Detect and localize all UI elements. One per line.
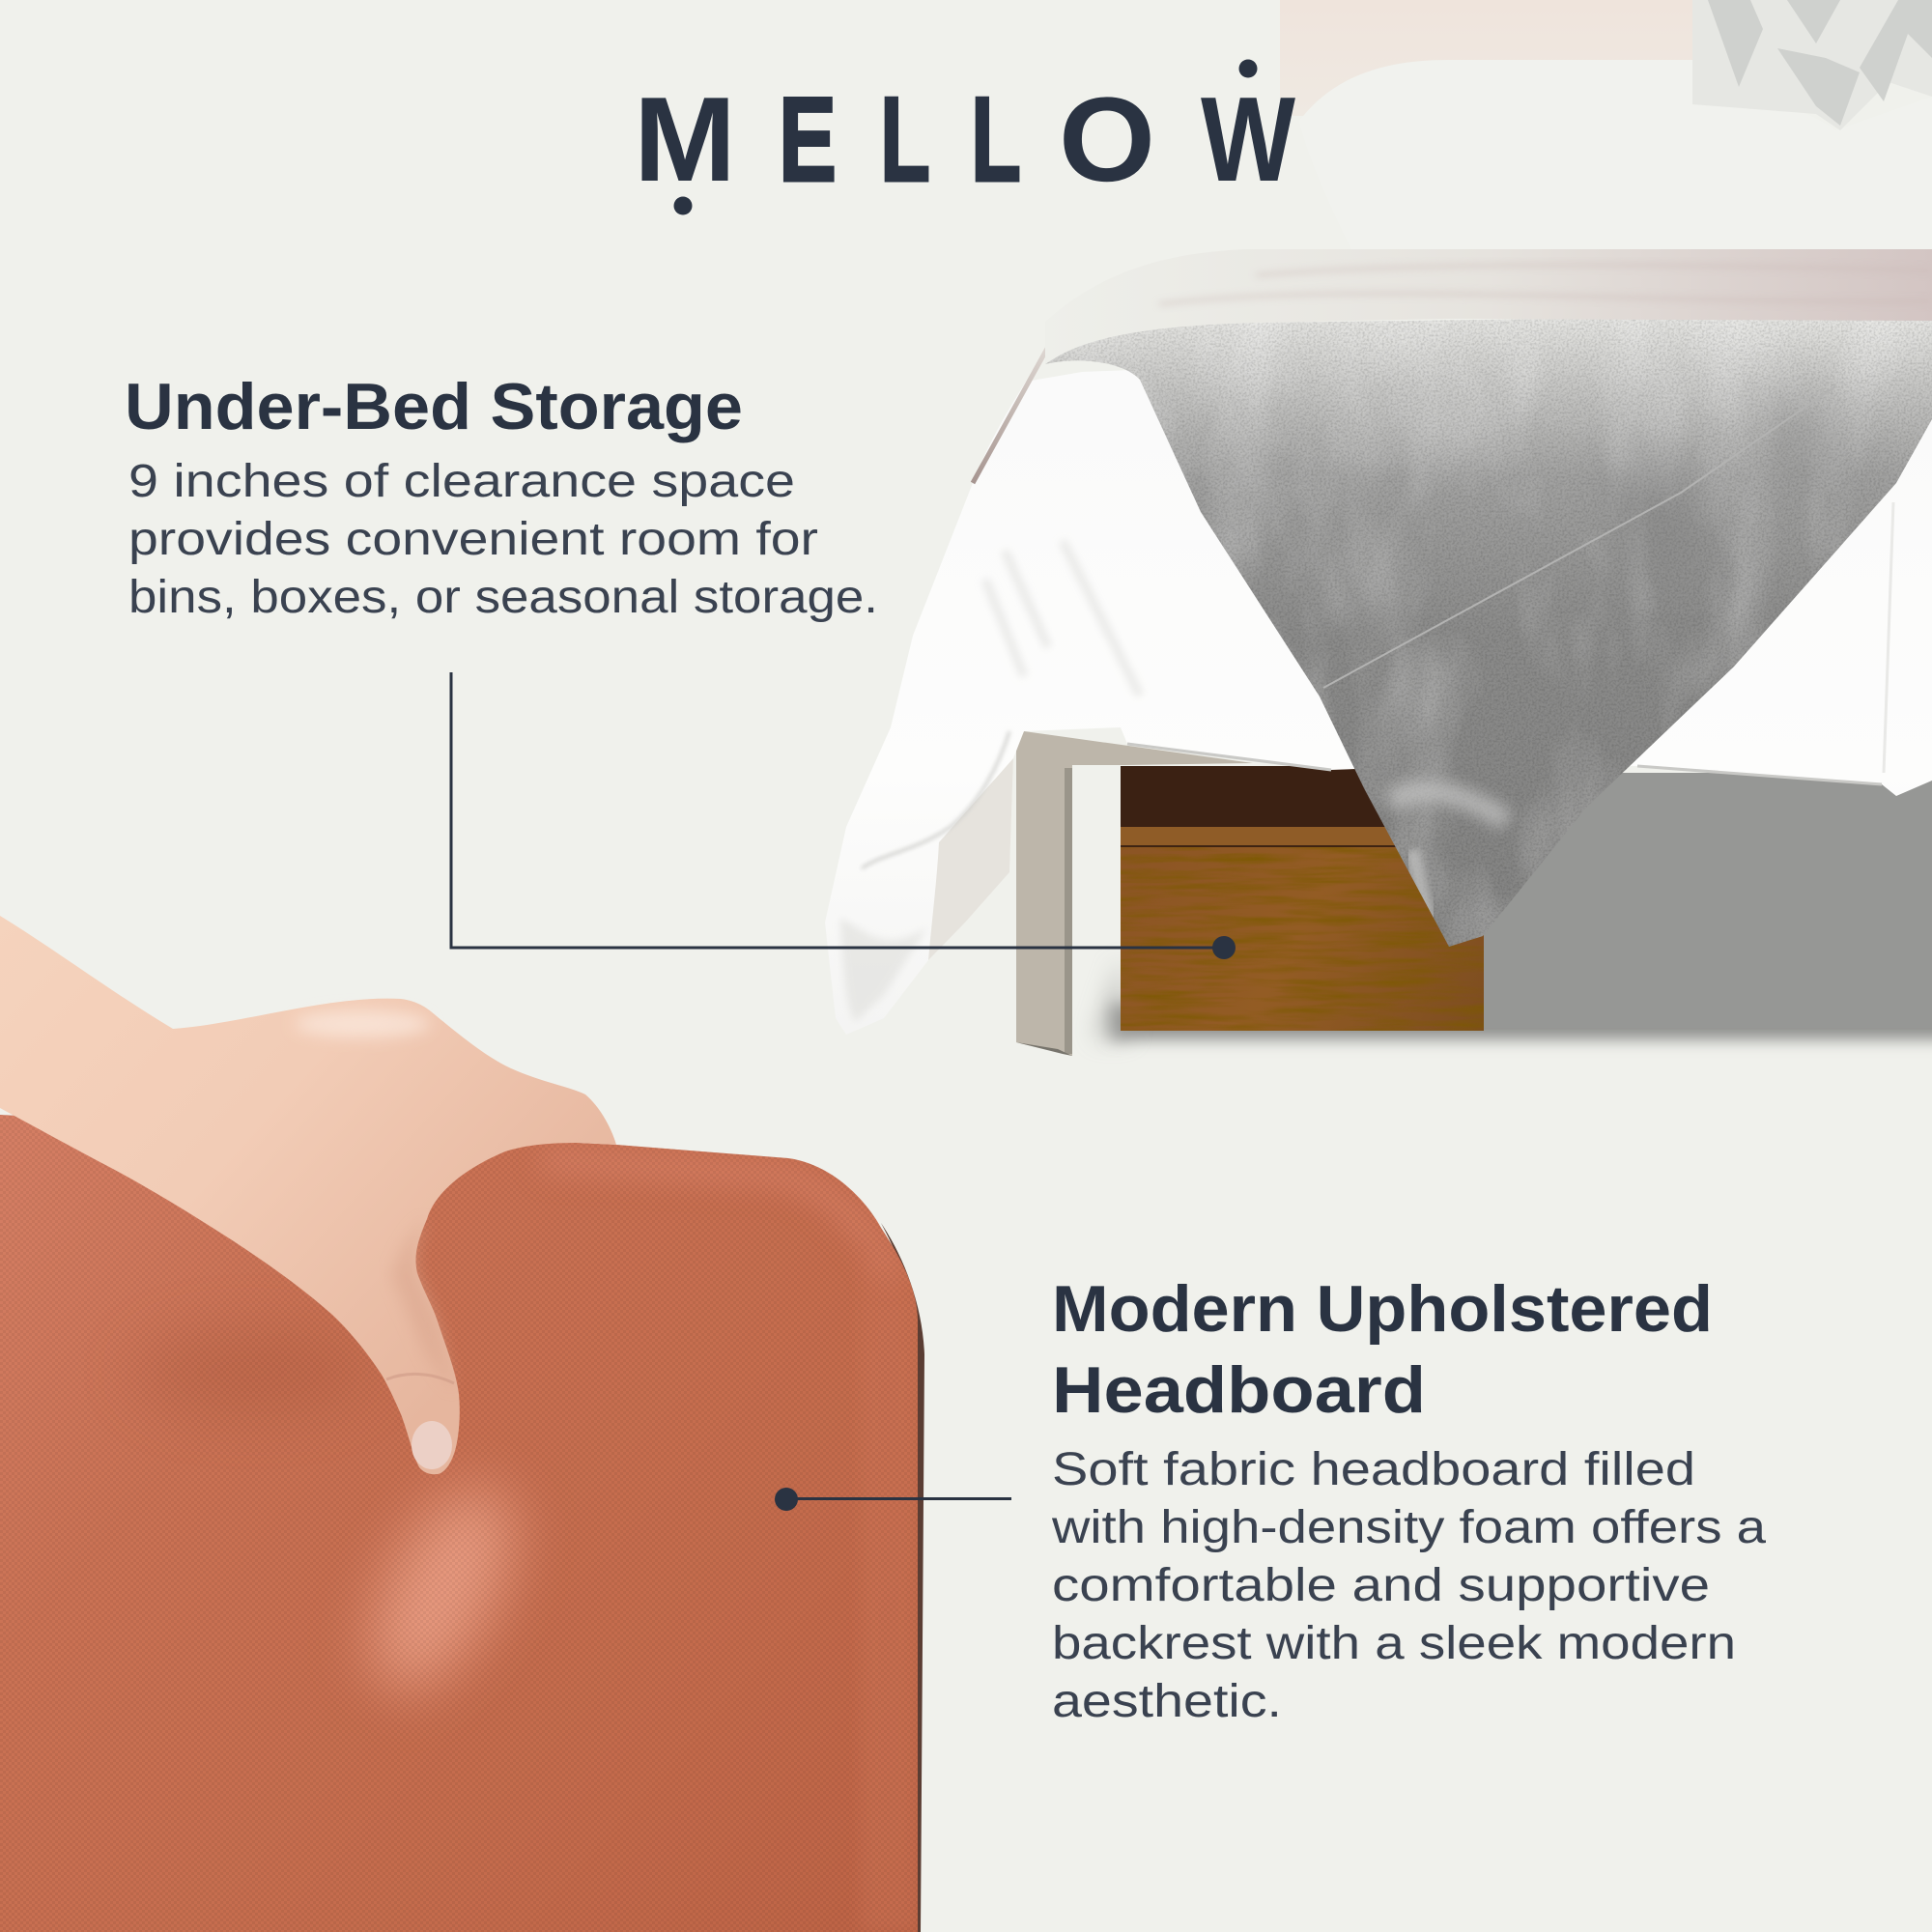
headboard top, faded [1280,0,1692,116]
heading: under-bed storage: Under-Bed Storage [125,370,743,443]
logo: M [634,73,736,207]
wooden storage box [1121,766,1484,1031]
bed photo [825,0,1932,1056]
pillows, faded [1299,60,1932,251]
logo: E [779,73,837,207]
headboard dark edge [881,1223,924,1932]
heading: modern upholstered headboard: Modern Upholstered [1052,1272,1713,1346]
text: under-bed storage description: bins, boxes, or seasonal storage. [128,572,878,623]
thumbnail [412,1421,452,1469]
logo: W [1201,73,1295,207]
text: headboard description: comfortable and supportive [1052,1560,1710,1611]
heading: modern upholstered headboard: Headboard [1052,1353,1426,1427]
throw blanket, faded [1045,249,1932,364]
text: under-bed storage description: provides convenient room for [128,514,818,565]
metal bed leg and rail [1016,731,1253,1056]
hand [0,916,616,1474]
under-bed shadow [1094,773,1932,1039]
white comforter [825,357,1932,1035]
text: under-bed storage description: 9 inches of clearance space [128,456,795,507]
headboard fabric [0,1063,927,1932]
text: headboard description: aesthetic. [1052,1676,1282,1727]
callout: storage line [451,672,1236,959]
comforter folds [840,338,1893,1022]
text: under-bed storage description [128,456,878,623]
logo: O [1059,73,1155,207]
callout: headboard line [775,1488,1011,1511]
logo: L [880,73,930,207]
text: headboard description [1051,1444,1766,1727]
text: headboard description: backrest with a sleek modern [1052,1618,1736,1669]
text: headboard description: Soft fabric headboard filled [1052,1444,1695,1495]
logo [634,60,1295,214]
logo: L [971,73,1021,207]
headboard [0,1063,927,1932]
heading: modern upholstered headboard [1052,1272,1713,1427]
text: headboard description: with high-density foam offers a [1051,1502,1766,1553]
grey blanket [1043,314,1932,956]
decorative pillow [1692,0,1932,130]
